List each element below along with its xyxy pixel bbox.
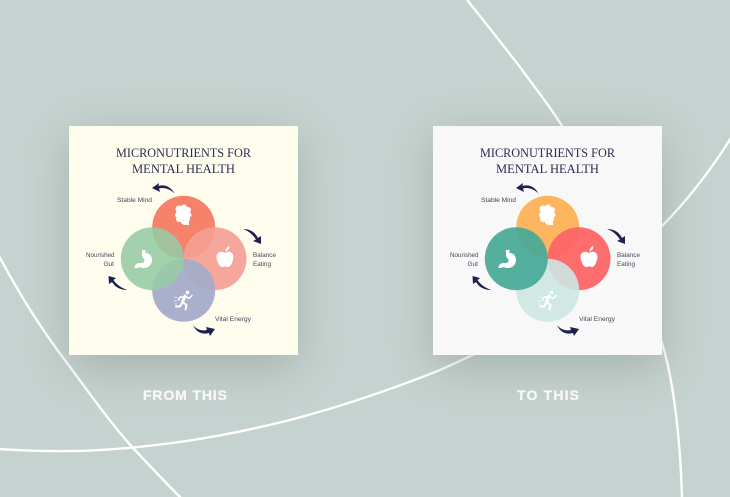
title xyxy=(480,146,616,176)
icon: stomach xyxy=(498,250,516,268)
icon: head xyxy=(175,204,192,225)
caption: from this: FROM THIS xyxy=(143,387,227,403)
labels: Balance xyxy=(253,252,276,259)
title: MENTAL HEALTH xyxy=(496,162,599,176)
labels: Stable Mind xyxy=(117,197,152,204)
caption: to this: TO THIS xyxy=(517,387,579,403)
labels: Eating xyxy=(617,261,635,268)
labels: Eating xyxy=(253,261,271,268)
icon: apple xyxy=(581,246,597,267)
title xyxy=(116,146,252,176)
icon: apple xyxy=(217,246,233,267)
labels: Nourished xyxy=(450,252,479,259)
icon: head xyxy=(539,204,556,225)
labels: Vital Energy xyxy=(579,316,616,323)
panel: to this xyxy=(433,126,662,355)
labels xyxy=(450,197,640,323)
labels: Nourished xyxy=(86,252,115,259)
icon: stomach xyxy=(134,250,152,268)
labels: Vital Energy xyxy=(215,316,252,323)
icon: runner xyxy=(174,291,192,310)
panel: from this xyxy=(69,126,298,355)
arrows xyxy=(472,183,625,336)
labels: Gut xyxy=(468,261,478,268)
labels xyxy=(86,197,276,323)
title: MICRONUTRIENTS FOR xyxy=(480,146,616,160)
labels: Gut xyxy=(104,261,114,268)
title: MICRONUTRIENTS FOR xyxy=(116,146,252,160)
venn diagram xyxy=(485,196,610,322)
title: MENTAL HEALTH xyxy=(132,162,235,176)
arrows xyxy=(108,183,261,336)
venn diagram xyxy=(121,196,246,322)
labels: Stable Mind xyxy=(481,197,516,204)
icon: runner xyxy=(538,291,556,310)
labels: Balance xyxy=(617,252,640,259)
